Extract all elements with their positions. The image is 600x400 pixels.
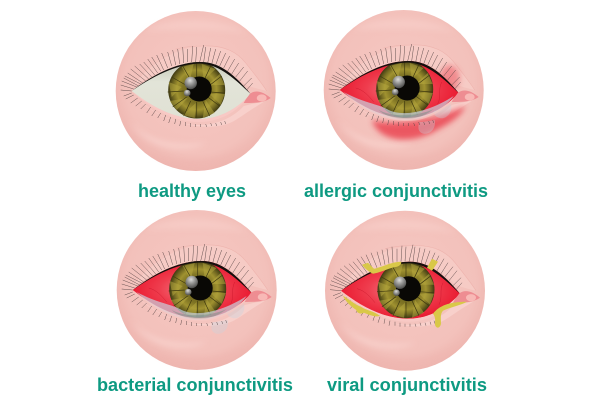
heading: healthy eyes: healthy eyes xyxy=(138,181,246,201)
tears xyxy=(137,292,247,334)
iris xyxy=(169,260,226,318)
iris xyxy=(376,60,433,118)
eye skin circle xyxy=(116,11,276,171)
tear duct xyxy=(452,90,479,102)
upper lid line xyxy=(340,61,459,93)
panel: viral conjunctivitis xyxy=(325,211,485,371)
lower rim xyxy=(133,290,252,321)
eye skin circle xyxy=(324,10,484,170)
upper lid line xyxy=(132,62,251,94)
inflamed sclera xyxy=(341,262,460,319)
iris xyxy=(168,62,225,118)
lower rim xyxy=(340,90,459,121)
panel: allergic conjunctivitis xyxy=(324,10,484,170)
eyelashes xyxy=(330,245,462,327)
tear duct xyxy=(244,91,271,103)
lower rim xyxy=(341,291,460,322)
tears xyxy=(344,92,454,134)
red swelling under eye xyxy=(372,106,466,140)
lower rim xyxy=(132,91,251,122)
tear duct xyxy=(453,291,480,303)
eye skin circle xyxy=(117,210,277,370)
eyelashes xyxy=(122,244,254,326)
panel: bacterial conjunctivitis xyxy=(117,210,277,370)
heading: bacterial conjunctivitis: bacterial conjunctivitis xyxy=(97,375,293,395)
upper lid line xyxy=(341,262,460,294)
upper lid line xyxy=(133,261,252,293)
panel: healthy eyes xyxy=(116,11,276,171)
heading: allergic conjunctivitis: allergic conjunctivitis xyxy=(304,181,488,201)
eyelashes xyxy=(121,45,253,127)
inflamed sclera xyxy=(340,61,459,118)
yellow discharge xyxy=(343,259,467,328)
heading: viral conjunctivitis: viral conjunctivitis xyxy=(327,375,487,395)
sclera xyxy=(132,62,251,119)
red swelling by inner corner xyxy=(440,65,460,91)
inflamed sclera xyxy=(133,261,252,318)
eyelashes xyxy=(329,44,461,126)
iris xyxy=(377,261,434,318)
eye skin circle xyxy=(325,211,485,371)
tear duct xyxy=(245,290,272,302)
